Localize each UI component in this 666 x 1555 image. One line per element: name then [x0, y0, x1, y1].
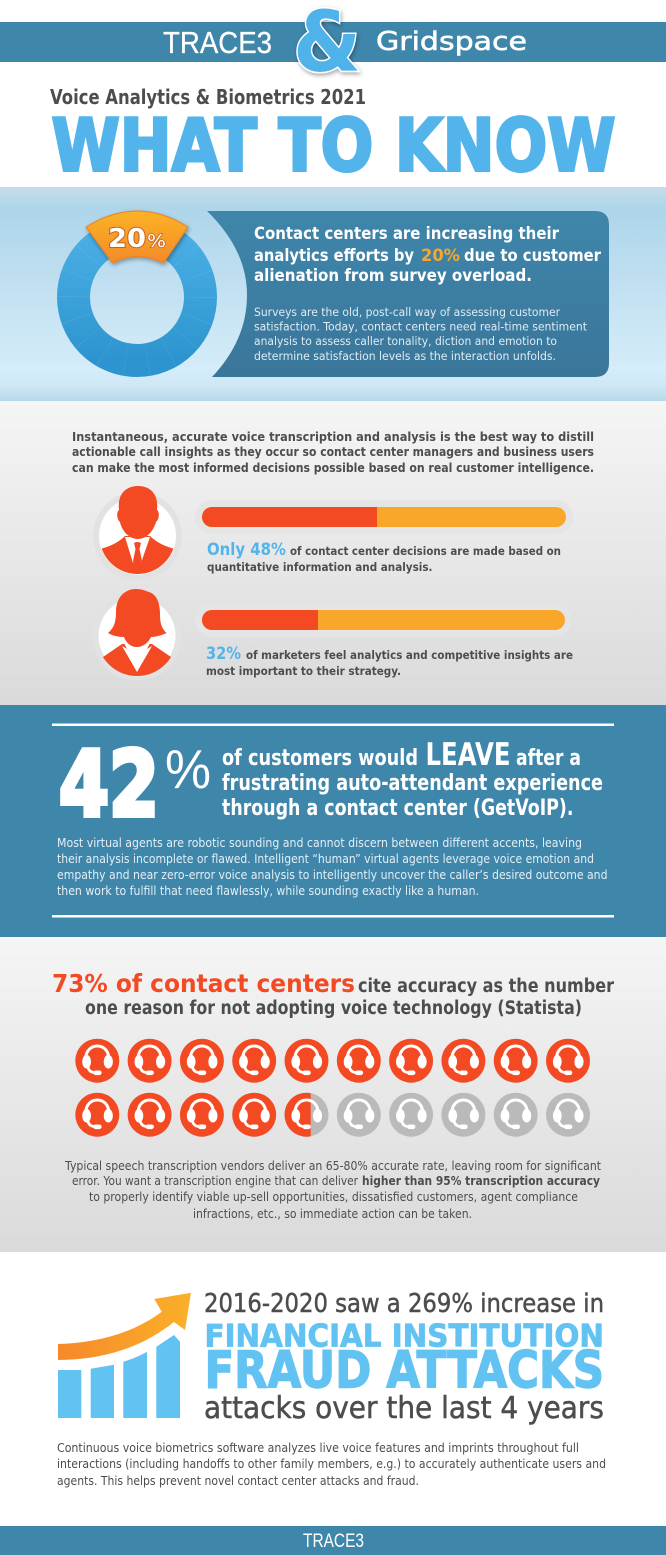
- body text: to properly identify viable up-sell opportunities, dissatisfied customers, agent compliance: [89, 1190, 578, 1204]
- donut chart: [74, 211, 200, 360]
- callout body: [254, 305, 587, 363]
- body text: then work to fulfill that need flawlessly, while sounding exactly like a human.: [57, 883, 479, 898]
- stat: 48%: of contact center decisions are made based on: [290, 544, 561, 558]
- footer: [0, 1526, 666, 1555]
- intro text: [72, 430, 594, 475]
- icon: businesswoman: [98, 589, 176, 676]
- 20% wedge: 20: [108, 224, 146, 254]
- headline: attacks over the last 4 years: [204, 1391, 604, 1426]
- body text: infractions, etc., so immediate action can be taken.: [193, 1207, 472, 1221]
- panel: 73% accuracy: [0, 937, 666, 1252]
- body text: Most virtual agents are robotic sounding and cannot discern between different accents, leaving: [57, 835, 582, 850]
- big number 42%: %: [165, 738, 211, 800]
- header bar: [0, 0, 666, 91]
- intro text: actionable call insights as they occur so contact center managers and business users: [72, 445, 594, 459]
- logo: Gridspace: Gridspace: [376, 27, 527, 57]
- callout heading: 20%: [421, 246, 460, 266]
- 20% wedge: %: [147, 231, 166, 252]
- progress bar: 48%: [195, 500, 573, 534]
- stat: 32%: [206, 644, 573, 678]
- intro text: Instantaneous, accurate voice transcription and analysis is the best way to distill: [72, 430, 594, 444]
- logo: Trace3: TRACE3: [163, 25, 272, 60]
- statement: [222, 737, 603, 821]
- callout heading: due to customer: [464, 246, 602, 266]
- headline: [204, 1289, 604, 1426]
- callout body: satisfaction. Today, contact centers need real-time sentiment: [254, 320, 587, 334]
- body text: higher than 95% transcription accuracy: [362, 1174, 600, 1188]
- statement: through a contact center (GetVoIP).: [222, 795, 574, 821]
- body text: Typical speech transcription vendors deliver an 65-80% accurate rate, leaving room for significant: [64, 1159, 601, 1173]
- heading: one reason for not adopting voice technology (Statista): [85, 998, 582, 1019]
- body text: their analysis incomplete or flawed. Intelligent “human” virtual agents leverage voice emotion and: [57, 851, 594, 866]
- callout heading: alienation from survey overload.: [254, 266, 532, 286]
- chart: rising bars with arrow: [58, 1293, 191, 1418]
- body text: agents. This helps prevent novel contact center attacks and fraud.: [57, 1474, 419, 1488]
- panel: decisions and marketers: [0, 401, 666, 705]
- body text: interactions (including handoffs to other family members, e.g.) to accurately authenticate users and: [57, 1457, 606, 1471]
- statement: of customers would: [222, 745, 418, 771]
- headline: FRAUD ATTACKS: [204, 1342, 604, 1400]
- icon array: 73 percent headsets: [75, 1039, 590, 1137]
- callout body: determine satisfaction levels as the interaction unfolds.: [254, 349, 556, 363]
- arrow: [58, 1293, 191, 1360]
- panel: 42% leave: [0, 705, 666, 937]
- stat: 48%: [207, 540, 561, 574]
- stat: 32%: of marketers feel analytics and competitive insights are: [246, 648, 573, 662]
- callout heading: Contact centers are increasing their: [254, 224, 560, 244]
- subtitle: Voice Analytics & Biometrics 2021: [50, 85, 366, 109]
- stat: 48%: quantitative information and analysis.: [207, 560, 432, 574]
- body text: [57, 1441, 606, 1488]
- headline: 2016-2020 saw a 269% increase in: [204, 1289, 604, 1319]
- callout heading: analytics efforts by: [254, 246, 414, 266]
- callout body: Surveys are the old, post-call way of assessing customer: [254, 305, 560, 319]
- footer logo: TRACE3: [303, 1531, 364, 1552]
- body text: error. You want a transcription engine that can deliver: [72, 1174, 359, 1188]
- 20% wedge: [86, 211, 188, 263]
- panel: 20% analytics: [0, 187, 666, 401]
- headline: FINANCIAL INSTITUTION: [204, 1318, 604, 1354]
- progress bar: 32%: [195, 603, 571, 637]
- body text: [64, 1159, 601, 1221]
- body text: Continuous voice biometrics software analyzes live voice features and imprints throughout full: [57, 1441, 579, 1455]
- statement: after a: [516, 745, 581, 771]
- stat: 48%: Only 48%: [207, 540, 286, 560]
- body text: [57, 835, 608, 898]
- intro text: can make the most informed decisions possible based on real customer intelligence.: [72, 461, 594, 475]
- big number 42%: 42: [59, 732, 159, 838]
- stat: 32%: 32%: [206, 644, 241, 664]
- heading: cite accuracy as the number: [358, 976, 615, 997]
- stat: 32%: most important to their strategy.: [206, 664, 401, 678]
- icon: businessman: [96, 486, 180, 574]
- heading: 73% of contact centers: [52, 969, 355, 998]
- panel: fraud attacks: [0, 1252, 666, 1526]
- callout heading: [254, 224, 602, 286]
- heading: [52, 969, 615, 1019]
- callout body: analysis to assess caller tonality, diction and emotion to: [254, 334, 557, 348]
- statement: LEAVE: [426, 737, 510, 773]
- callout panel: [207, 211, 609, 377]
